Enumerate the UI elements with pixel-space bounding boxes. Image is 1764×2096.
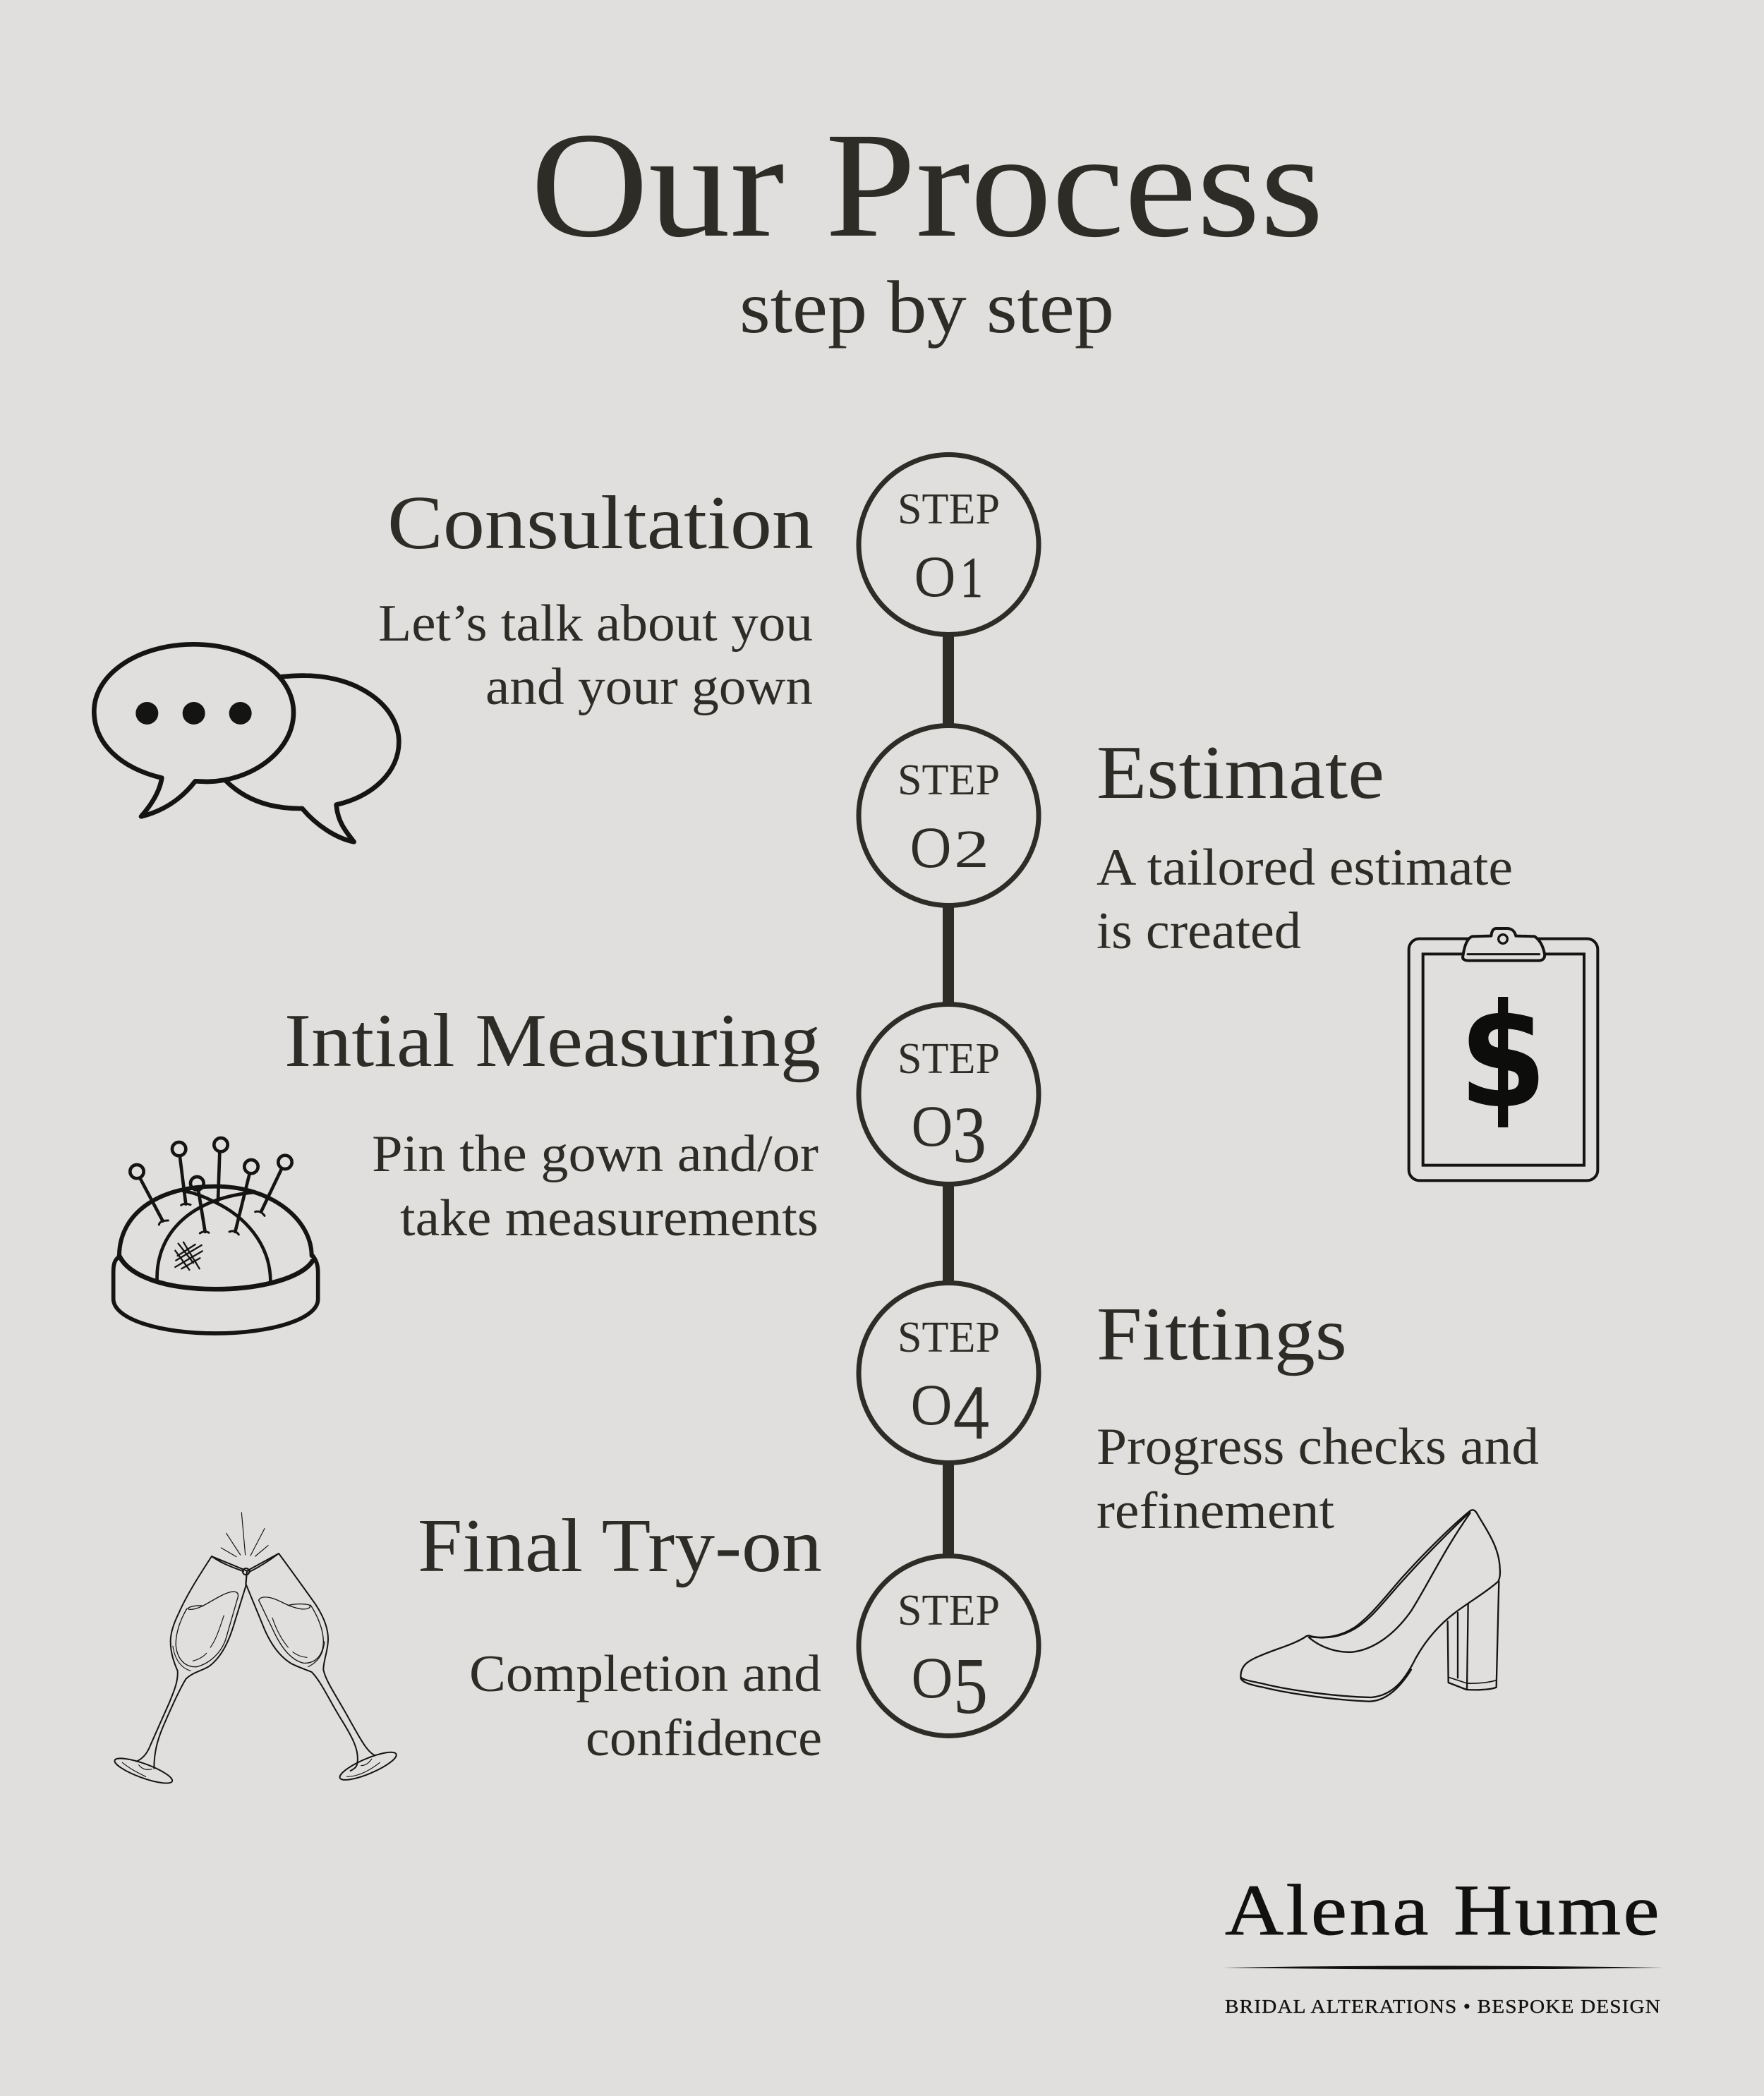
step 02 badge: 0: [908, 816, 953, 880]
step 04 badge: [859, 1283, 1039, 1463]
step text: Final Try-on: confidence: [586, 1709, 822, 1767]
step 03 badge: STEP: [898, 1035, 1000, 1083]
timeline: [859, 454, 1039, 1735]
icon: high-heel shoe: [1240, 1510, 1500, 1702]
step text: Intial Measuring: Intial Measuring: [284, 999, 821, 1083]
step text: Consultation: Let’s talk about you: [378, 595, 813, 653]
step 05 badge: [859, 1556, 1039, 1735]
left glass: [112, 1556, 247, 1788]
step 01 badge: [859, 454, 1039, 635]
step text: Final Try-on: Final Try-on: [418, 1504, 822, 1588]
icon: clipboard with dollar sign: [1409, 928, 1597, 1180]
step 03 badge: 0: [910, 1095, 955, 1159]
step text: Intial Measuring: [284, 999, 821, 1247]
subtitle: step by step: [739, 266, 1114, 349]
step text: Consultation: Consultation: [387, 481, 814, 565]
stitches: [175, 1242, 203, 1270]
step 02 badge: [859, 725, 1039, 906]
step text: Final Try-on: Completion and: [469, 1645, 821, 1703]
step text: Intial Measuring: take measurements: [400, 1189, 818, 1247]
step 04 badge: STEP: [898, 1314, 1000, 1362]
step text: Fittings: Progress checks and: [1097, 1418, 1539, 1476]
sparkle: [221, 1513, 268, 1557]
step 05 badge: STEP: [898, 1587, 1000, 1635]
step text: Consultation: and your gown: [485, 658, 813, 716]
step 03 badge: 3: [953, 1090, 986, 1180]
tagline: BRIDAL ALTERATIONS • BESPOKE DESIGN: [1225, 1996, 1661, 2017]
pins: [130, 1138, 292, 1235]
icon: champagne glasses: [112, 1513, 399, 1788]
step text: Estimate: is created: [1097, 902, 1301, 960]
title: Our Process: [531, 102, 1324, 269]
step 05 badge: 0: [910, 1647, 955, 1711]
icon: speech bubbles: [94, 644, 399, 842]
step text: Estimate: Estimate: [1097, 731, 1384, 815]
step 01 badge: 0: [912, 545, 957, 610]
step text: Fittings: Fittings: [1097, 1292, 1347, 1376]
icon: dollar sign: $: [1459, 974, 1547, 1141]
step text: Fittings: refinement: [1097, 1482, 1334, 1540]
step text: Estimate: [1097, 731, 1513, 960]
step 01 badge: STEP: [898, 485, 1000, 533]
step 04 badge: 0: [909, 1374, 954, 1438]
step text: Fittings: [1097, 1292, 1539, 1540]
step text: Estimate: A tailored estimate: [1097, 839, 1513, 897]
step 04 badge: 4: [953, 1370, 991, 1455]
right glass: [243, 1553, 399, 1785]
logo: [1223, 1870, 1663, 2017]
step 02 badge: STEP: [898, 756, 1000, 804]
connector lines: [943, 635, 954, 1556]
icon: pin cushion: [114, 1138, 318, 1333]
step text: Final Try-on: [418, 1504, 822, 1767]
step 03 badge: [859, 1005, 1039, 1184]
step 05 badge: 5: [953, 1641, 988, 1731]
brand name: Alena Hume: [1225, 1870, 1662, 1951]
step text: Intial Measuring: Pin the gown and/or: [372, 1125, 818, 1183]
step text: Consultation: [378, 481, 814, 716]
step 01 badge: 1: [960, 545, 983, 610]
step 02 badge: 2: [954, 820, 989, 879]
